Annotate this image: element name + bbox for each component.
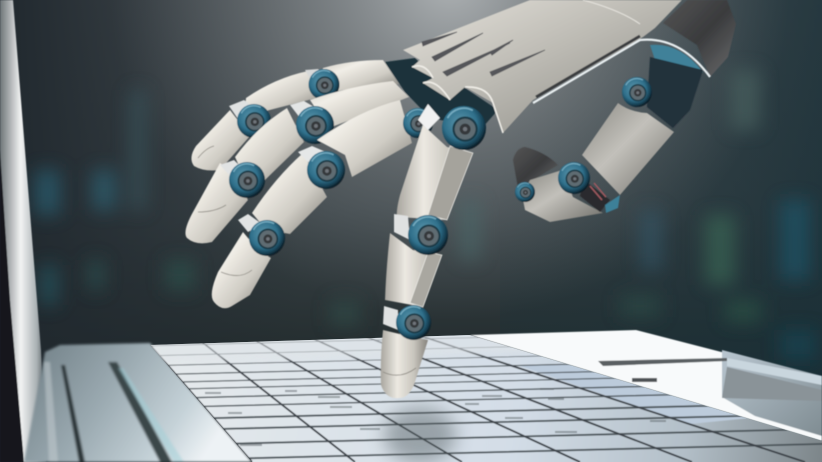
knuckle joint of middle finger <box>403 108 433 138</box>
pinky finger <box>191 60 399 170</box>
knuckle mechanics <box>385 58 498 128</box>
forearm and palm <box>403 0 736 133</box>
thumb <box>513 57 703 222</box>
index finger <box>381 104 486 398</box>
keyboard keys <box>150 335 822 462</box>
middle finger <box>212 100 412 308</box>
robot hand <box>185 0 736 398</box>
laptop base, left palm rest <box>24 343 252 462</box>
laptop screen edge <box>0 0 46 462</box>
ring finger <box>185 81 409 243</box>
laptop base, right palm rest with white highlight <box>470 330 822 441</box>
